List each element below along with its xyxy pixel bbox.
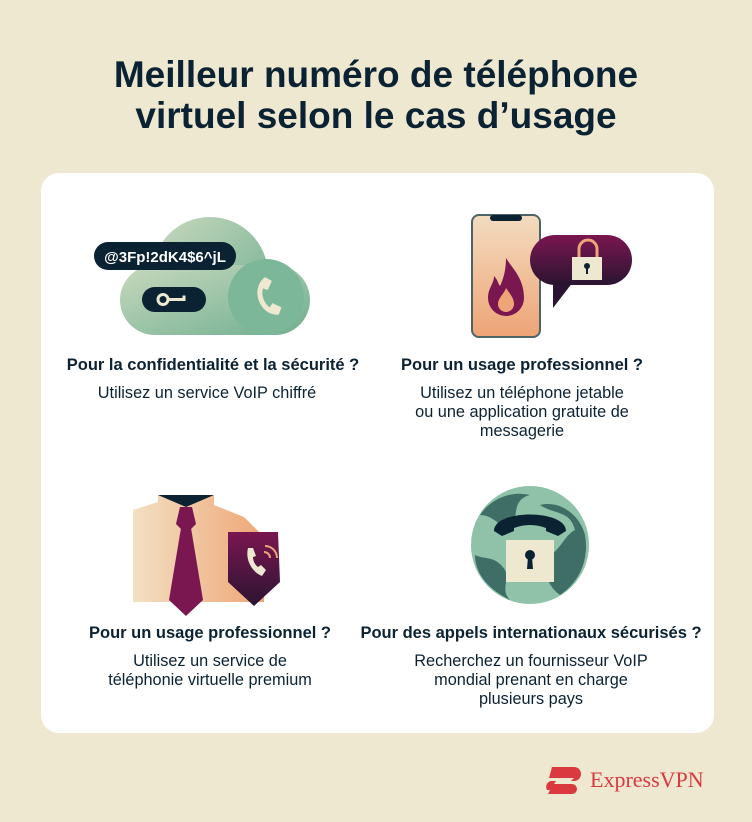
text: pro 1: Pour un usage professionnel ?	[401, 356, 643, 374]
icon: phone with flame and unlocked bubble	[471, 214, 632, 338]
icon: cloud with password and phone	[94, 217, 310, 335]
icon: cloud with password and phone: @3Fp!2dK4$6^jL	[104, 249, 226, 266]
text: privacy: Pour la confidentialité et la sécurité ?	[67, 356, 359, 374]
text: pro 2 sub: Utilisez un service de	[133, 652, 287, 670]
card panel	[41, 173, 714, 733]
title: virtuel selon le cas d’usage	[135, 95, 617, 136]
text: international: Pour des appels internationaux sécurisés ?	[360, 624, 702, 642]
logo: ExpressVPN: ExpressVPN	[590, 767, 704, 792]
text: pro 2 sub	[108, 652, 312, 689]
text: international sub: mondial prenant en charge	[434, 671, 628, 689]
text: privacy sub: Utilisez un service VoIP chiffré	[98, 384, 316, 402]
title	[114, 54, 638, 136]
text: international sub: Recherchez un fournisseur VoIP	[414, 652, 648, 670]
text: international sub: plusieurs pays	[479, 690, 583, 708]
logo: ExpressVPN	[546, 767, 704, 794]
text: pro 1 sub: Utilisez un téléphone jetable	[420, 384, 624, 402]
title: Meilleur numéro de téléphone	[114, 54, 638, 95]
text: pro 1 sub: ou une application gratuite de	[415, 403, 629, 421]
icon: shirt tie shield	[133, 495, 280, 616]
icon: globe with phone lock	[471, 486, 589, 604]
text: pro 2 sub: téléphonie virtuelle premium	[108, 671, 312, 689]
text: pro 1 sub: messagerie	[480, 422, 564, 440]
text: pro 2: Pour un usage professionnel ?	[89, 624, 331, 642]
text: pro 1 sub	[415, 384, 629, 440]
text: international sub	[414, 652, 648, 708]
